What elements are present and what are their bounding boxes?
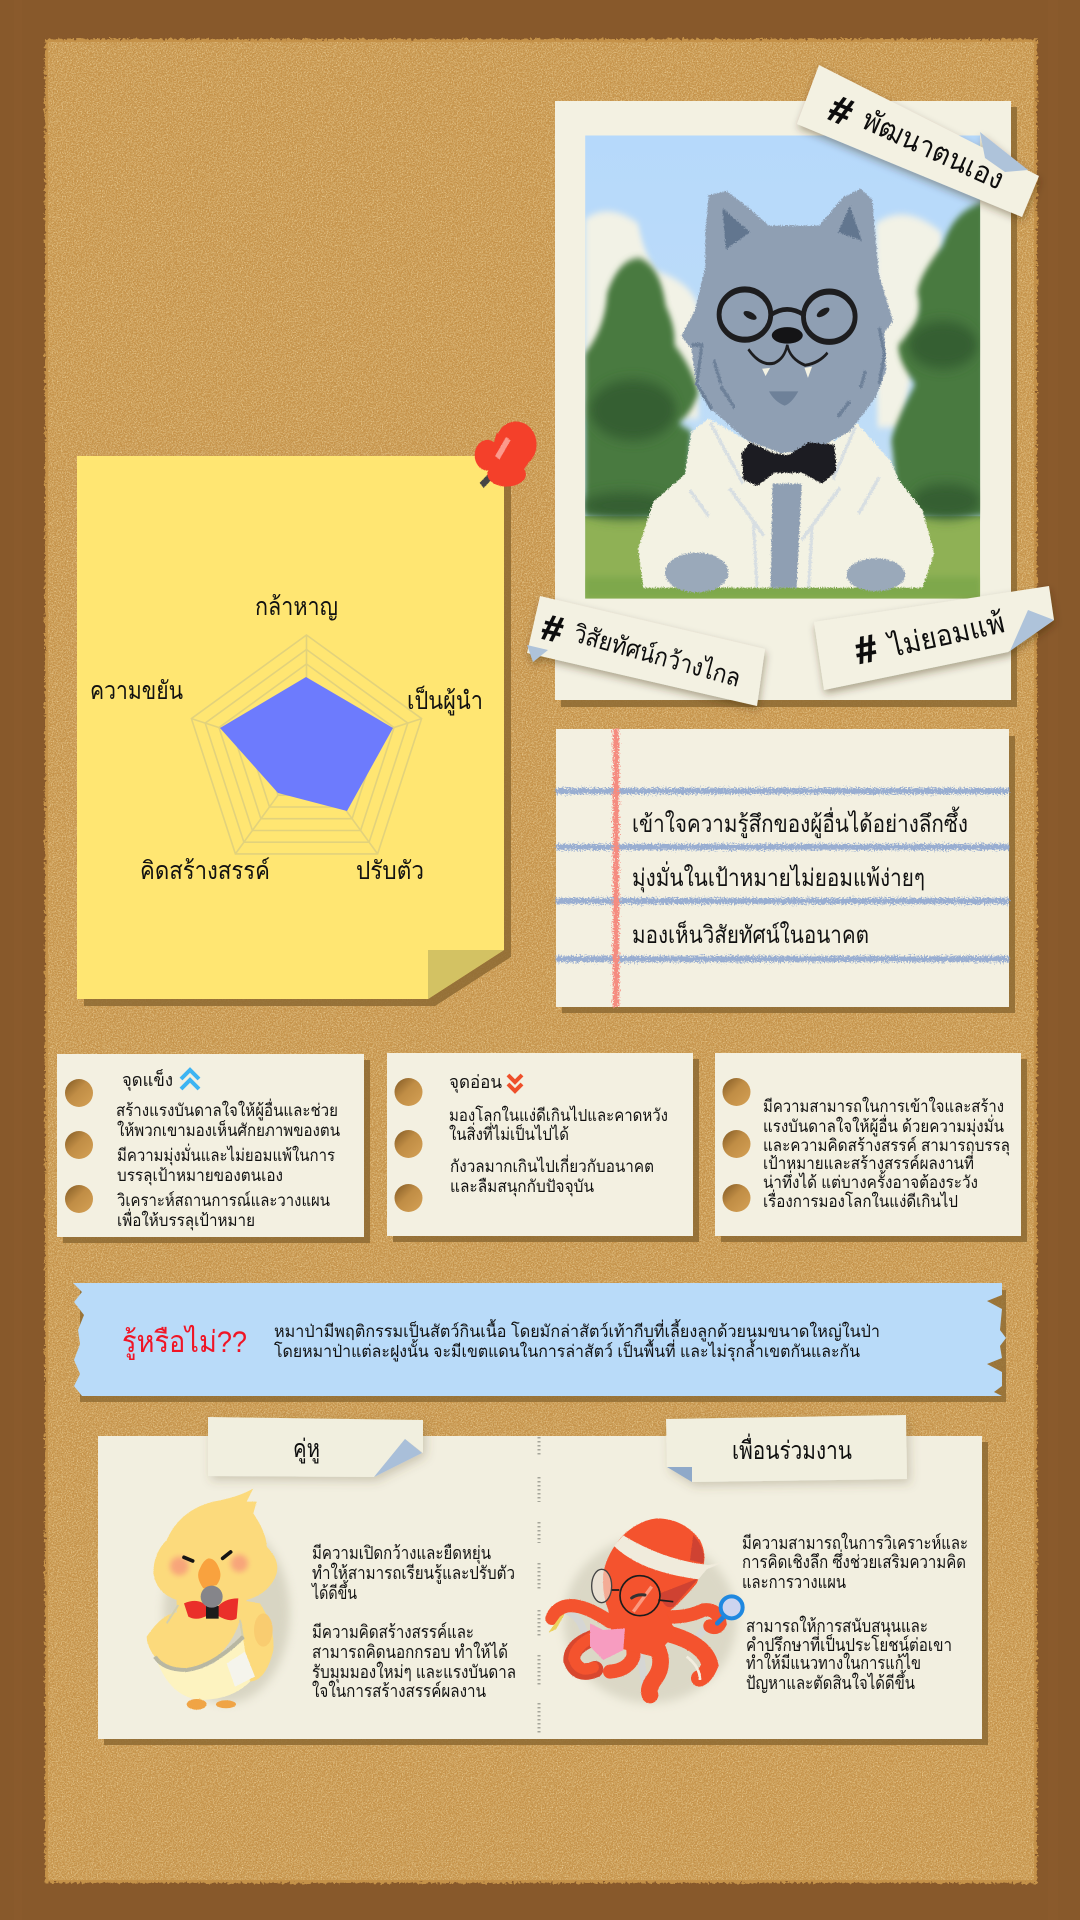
radar chart bbox=[191, 635, 422, 854]
illustration: wolf scientist bbox=[581, 135, 984, 599]
weaknesses text: และลืมสนุกกับปัจจุบัน bbox=[450, 1177, 594, 1197]
panel: partner and colleague sheet bbox=[98, 1436, 988, 1745]
notebook text: มองเห็นวิสัยทัศน์ในอนาคต bbox=[632, 920, 869, 949]
radar label: กล้าหาญ bbox=[255, 593, 338, 621]
radar label: ปรับตัว bbox=[356, 857, 424, 885]
tag: never give up bbox=[814, 586, 1054, 690]
tag: self development: พัฒนาตนเอง bbox=[857, 104, 1009, 196]
heading: strengths: จุดแข็ง bbox=[122, 1068, 173, 1091]
bow tie bbox=[741, 442, 836, 486]
panel: did you know tape bbox=[73, 1283, 1006, 1402]
partner text bbox=[310, 1543, 516, 1701]
radar label: เป็นผู้นำ bbox=[407, 685, 483, 716]
colleague text: ทำให้มีแนวทางในการแก้ไข bbox=[746, 1652, 921, 1673]
partner text: ใจในการสร้างสรรค์ผลงาน bbox=[312, 1680, 486, 1701]
tag: never give up: ไม่ยอมแพ้ bbox=[884, 605, 1008, 664]
strengths text: เพื่อให้บรรลุเป้าหมาย bbox=[117, 1208, 255, 1231]
partner text: สามารถคิดนอกกรอบ ทำให้ได้ bbox=[312, 1641, 508, 1662]
sticky note fold bbox=[428, 950, 504, 999]
icon: double up chevron bbox=[181, 1070, 199, 1089]
strengths text: วิเคราะห์สถานการณ์และวางแผน bbox=[117, 1191, 330, 1210]
tag: broad vision: # bbox=[538, 606, 567, 651]
summary text bbox=[763, 1096, 1010, 1211]
weaknesses text: ในสิ่งที่ไม่เป็นไปได้ bbox=[449, 1122, 569, 1144]
summary text: มีความสามารถในการเข้าใจและสร้าง bbox=[763, 1096, 1004, 1116]
wolf coat bbox=[638, 419, 934, 588]
colleague text: และการวางแผน bbox=[742, 1572, 846, 1592]
illustration: duck bbox=[147, 1488, 290, 1710]
panel: sticky note radar chart bbox=[77, 456, 511, 1006]
summary text: แรงบันดาลใจให้ผู้อื่น ด้วยความมุ่งมั่น bbox=[763, 1114, 1004, 1137]
tag: self development bbox=[797, 65, 1039, 217]
summary text: น่าทึ่งได้ แต่บางครั้งอาจต้องระวัง bbox=[763, 1170, 978, 1192]
colleague text bbox=[742, 1532, 968, 1693]
strengths text: มีความมุ่งมั่นและไม่ยอมแพ้ในการ bbox=[117, 1143, 335, 1166]
partner text: มีความคิดสร้างสรรค์และ bbox=[312, 1622, 474, 1642]
strengths text bbox=[116, 1098, 340, 1231]
did you know text bbox=[274, 1319, 880, 1362]
did you know text: หมาป่ามีพฤติกรรมเป็นสัตว์กินเนื้อ โดยมักล่าสัตว์เท้ากีบที่เลี้ยงลูกด้วยนมขนาดใหญ่ในป่า bbox=[274, 1319, 880, 1342]
weaknesses text: กังวลมากเกินไปเกี่ยวกับอนาคต bbox=[450, 1154, 654, 1176]
tag: broad vision bbox=[527, 596, 765, 706]
notebook text: เข้าใจความรู้สึกของผู้อื่นได้อย่างลึกซึ้ง bbox=[632, 806, 968, 839]
illustration: octopus bbox=[548, 1518, 743, 1703]
weaknesses text: มองโลกในแง่ดีเกินไปและคาดหวัง bbox=[449, 1105, 668, 1125]
partner text: รับมุมมองใหม่ๆ และแรงบันดาล bbox=[312, 1661, 516, 1683]
colleague text: ปัญหาและตัดสินใจได้ดีขึ้น bbox=[746, 1670, 915, 1693]
partner text: ได้ดีขึ้น bbox=[310, 1580, 357, 1603]
strengths text: ให้พวกเขามองเห็นศักยภาพของตน bbox=[117, 1119, 340, 1140]
notebook text: มุ่งมั่นในเป้าหมายไม่ยอมแพ้ง่ายๆ bbox=[632, 861, 925, 893]
panel: strengths bbox=[57, 1054, 370, 1243]
tab: colleague bbox=[666, 1415, 907, 1482]
strengths text: บรรลุเป้าหมายของตนเอง bbox=[117, 1166, 283, 1186]
wolf head bbox=[681, 189, 893, 453]
radar label: คิดสร้างสรรค์ bbox=[140, 857, 270, 885]
tag: self development: # bbox=[822, 88, 859, 135]
tag: never give up: # bbox=[852, 628, 880, 673]
weaknesses text bbox=[449, 1105, 668, 1197]
tab: partner bbox=[208, 1417, 423, 1477]
colleague text: คำปรึกษาที่เป็นประโยชน์ต่อเขา bbox=[746, 1632, 952, 1655]
heading: weaknesses: จุดอ่อน bbox=[449, 1072, 502, 1093]
radar label: ความขยัน bbox=[90, 677, 183, 705]
panel: notebook paper bbox=[556, 729, 1015, 1013]
partner text: มีความเปิดกว้างและยืดหยุ่น bbox=[312, 1543, 491, 1564]
summary text: เรื่องการมองโลกในแง่ดีเกินไป bbox=[763, 1189, 958, 1211]
colleague text: การคิดเชิงลึก ซึ่งช่วยเสริมความคิด bbox=[742, 1549, 966, 1572]
panel: summary bbox=[715, 1053, 1027, 1242]
tab: partner: คู่หู bbox=[293, 1435, 320, 1464]
wolf glasses and face bbox=[719, 289, 855, 406]
tab: colleague: เพื่อนร่วมงาน bbox=[732, 1433, 852, 1465]
icon: red push pin bbox=[475, 421, 537, 487]
panel: wolf polaroid photo bbox=[555, 101, 1017, 707]
radar data polygon bbox=[220, 677, 393, 811]
summary text: และความคิดสร้างสรรค์ สามารถบรรลุ bbox=[763, 1136, 1010, 1156]
heading: did you know: รู้หรือไม่?? bbox=[122, 1324, 247, 1360]
partner text: ทำให้สามารถเรียนรู้และปรับตัว bbox=[312, 1562, 515, 1584]
summary text: เป้าหมายและสร้างสรรค์ผลงานที่ bbox=[763, 1151, 974, 1173]
tag: broad vision: วิสัยทัศน์กว้างไกล bbox=[570, 619, 744, 693]
icon: double down chevron bbox=[508, 1075, 522, 1091]
colleague text: สามารถให้การสนับสนุนและ bbox=[746, 1615, 928, 1637]
did you know text: โดยหมาป่าแต่ละฝูงนั้น จะมีเขตแดนในการล่าสัตว์ เป็นพื้นที่ และไม่รุกล้ำเขตกันและกัน bbox=[274, 1339, 860, 1362]
panel: weaknesses bbox=[387, 1053, 699, 1242]
colleague text: มีความสามารถในการวิเคราะห์และ bbox=[742, 1532, 968, 1553]
strengths text: สร้างแรงบันดาลใจให้ผู้อื่นและช่วย bbox=[116, 1098, 338, 1121]
